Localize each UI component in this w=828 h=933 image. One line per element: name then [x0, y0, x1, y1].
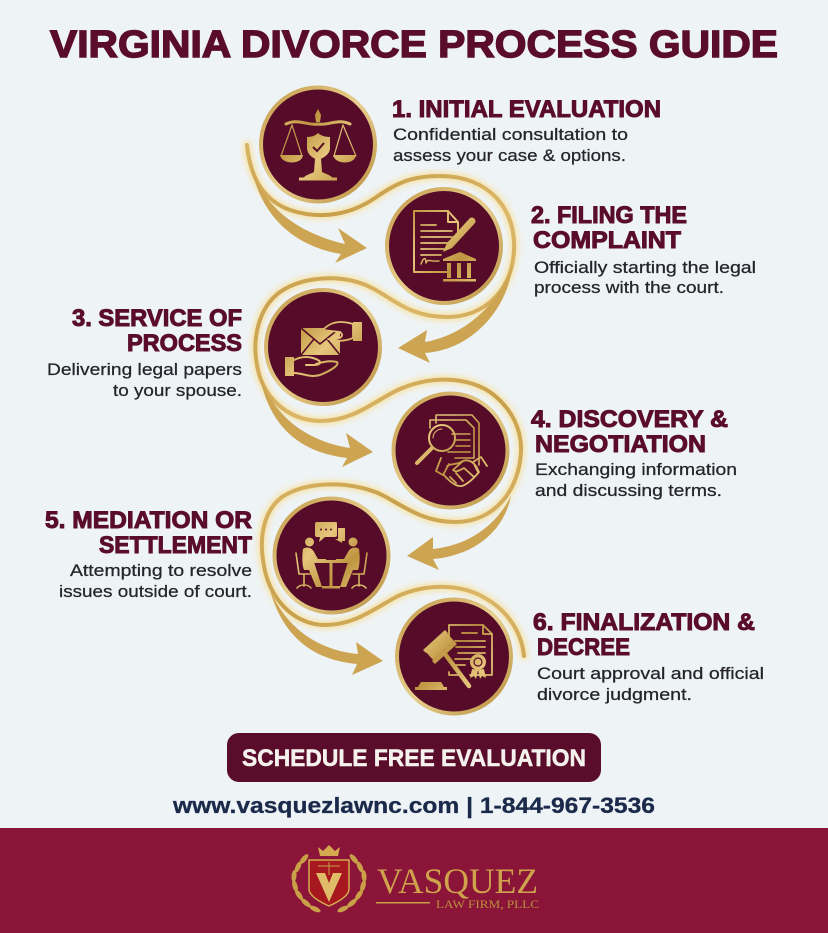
step 2 text: [531, 202, 756, 297]
step 5 text: issues outside of court.: [59, 582, 252, 601]
step 3 text: [47, 305, 242, 400]
step 2 text: COMPLAINT: [533, 227, 681, 254]
icon: scales of justice: [261, 88, 375, 202]
logo: crest: [291, 845, 367, 914]
step 4 text: and discussing terms.: [535, 481, 722, 500]
step 1 text: [392, 96, 661, 165]
arrow: step 1 to step 2: [251, 165, 367, 263]
icon: envelope and hands: [266, 290, 380, 404]
step 4 text: [531, 406, 737, 500]
step 6 text: Court approval and official: [537, 664, 764, 683]
step 1 text: assess your case & options.: [393, 146, 626, 165]
footer band: [0, 828, 828, 933]
title: VIRGINIA DIVORCE PROCESS GUIDE: [50, 24, 778, 66]
step 4 text: Exchanging information: [535, 460, 737, 479]
step 6 text: [533, 609, 764, 704]
step 3 text: PROCESS: [127, 330, 242, 357]
logo: wordmark: VASQUEZ: [377, 861, 538, 901]
step 4 text: NEGOTIATION: [535, 431, 706, 458]
step 5 text: 5. MEDIATION OR: [45, 507, 252, 534]
step 6 text: 6. FINALIZATION &: [533, 609, 755, 636]
arrow: step 5 to step 6: [270, 590, 383, 675]
step 3 text: 3. SERVICE OF: [72, 305, 242, 332]
call-to-action button: [227, 733, 601, 782]
logo: wordmark: LAW FIRM, PLLC: [436, 897, 539, 911]
step 2 text: 2. FILING THE: [531, 202, 687, 229]
step 2 text: process with the court.: [534, 278, 724, 297]
step 5 text: SETTLEMENT: [99, 532, 252, 559]
step 5 text: [45, 507, 252, 601]
step 6 text: divorce judgment.: [537, 685, 692, 704]
step 3 text: Delivering legal papers: [47, 360, 242, 379]
step 5 text: Attempting to resolve: [70, 561, 252, 580]
step 6 text: DECREE: [537, 634, 630, 661]
icon: gavel and decree: [397, 600, 511, 714]
call-to-action button: SCHEDULE FREE EVALUATION: [242, 745, 586, 772]
step 2 text: Officially starting the legal: [534, 258, 756, 277]
winding gold ribbon: [247, 145, 524, 656]
icon: mediation meeting at table: [274, 498, 388, 612]
step 1 text: Confidential consultation to: [393, 125, 628, 144]
arrow: step 4 to step 5: [407, 496, 511, 570]
step 4 text: 4. DISCOVERY &: [531, 406, 728, 433]
contact line: www.vasquezlawnc.com | 1-844-967-3536: [172, 793, 655, 818]
step 1 text: 1. INITIAL EVALUATION: [392, 96, 661, 123]
arrow: step 3 to step 4: [259, 372, 373, 467]
icon: magnifier, documents and handshake: [394, 394, 508, 508]
step 3 text: to your spouse.: [113, 381, 242, 400]
icon: document and courthouse: [387, 189, 501, 303]
arrow: step 2 to step 3: [398, 268, 512, 363]
